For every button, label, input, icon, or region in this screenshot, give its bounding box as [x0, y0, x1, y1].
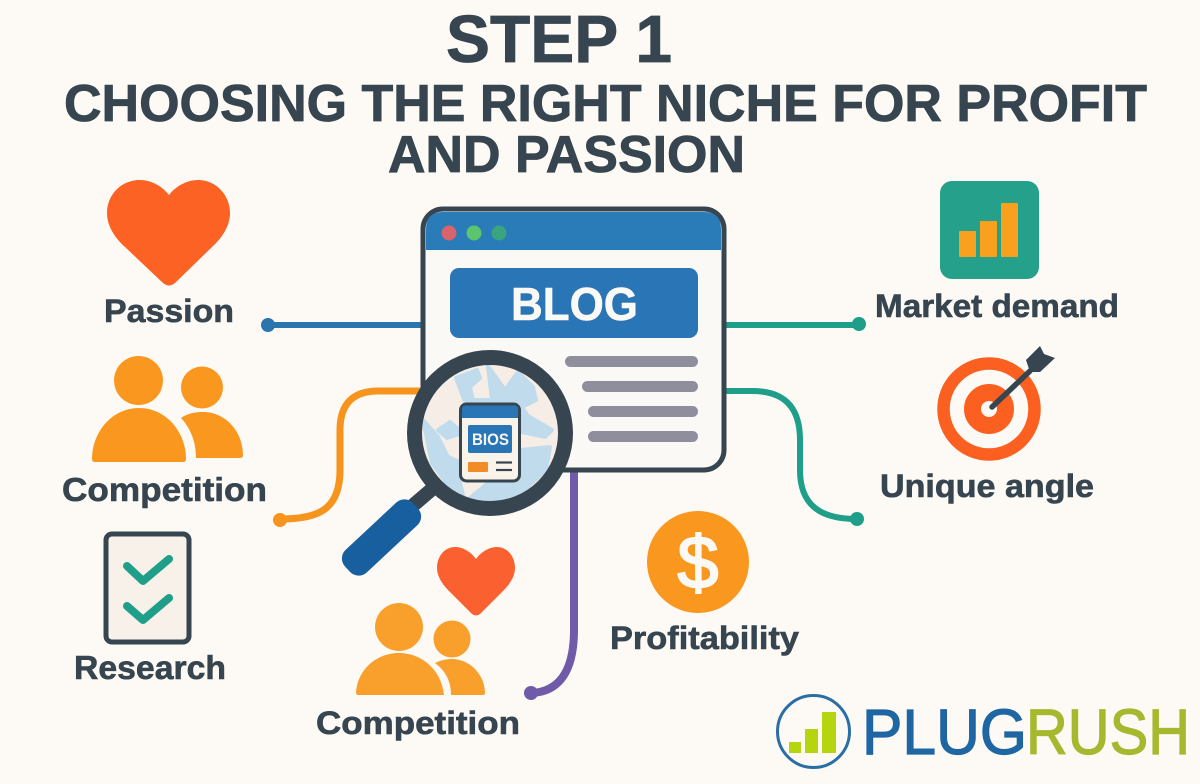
icon: dollar coin: [647, 511, 749, 613]
icon: research checklist: [106, 534, 189, 642]
globe map: [423, 366, 552, 505]
label: market demand: Market demand: [875, 288, 1119, 324]
label: research: Research: [74, 649, 226, 686]
magnifying glass: [337, 358, 566, 581]
icon: dollar coin: $: [677, 521, 719, 604]
browser window: [423, 209, 724, 470]
logo icon: [778, 696, 850, 768]
label: profitability: Profitability: [610, 620, 799, 656]
blog banner: BLOG: [511, 278, 638, 330]
icon: competition people: [92, 356, 243, 462]
mini page: BIOS: BIOS: [472, 430, 509, 449]
label: competition: Competition: [62, 471, 267, 508]
icon: small heart: [437, 547, 515, 616]
label: passion: Passion: [104, 293, 234, 329]
connector: market demand: [722, 317, 866, 331]
title: CHOOSING THE RIGHT NICHE FOR PROFIT: [64, 74, 1147, 132]
mini page: BIOS: [460, 404, 520, 481]
connector: passion: [261, 318, 425, 332]
label: unique angle: Unique angle: [880, 468, 1094, 504]
icon: lower people: [356, 603, 485, 695]
title: AND PASSION: [388, 125, 745, 183]
label: competition lower: Competition: [316, 705, 520, 741]
connector: competition lower: [524, 470, 574, 700]
title: [64, 2, 1147, 183]
connector: unique angle: [722, 391, 864, 526]
logo wordmark: [862, 696, 1190, 768]
logo wordmark: PLUG: [862, 696, 1027, 768]
browser title bar: [426, 212, 721, 250]
window buttons: [442, 226, 506, 240]
icon: passion heart: [107, 180, 230, 286]
icon: market demand chart: [940, 181, 1039, 279]
text lines: [565, 356, 698, 442]
logo: plugrush: [778, 696, 1190, 768]
connector: competition: [273, 391, 425, 527]
title: STEP 1: [446, 2, 672, 77]
blog banner: [450, 268, 698, 338]
icon: target with arrow: [944, 346, 1055, 454]
